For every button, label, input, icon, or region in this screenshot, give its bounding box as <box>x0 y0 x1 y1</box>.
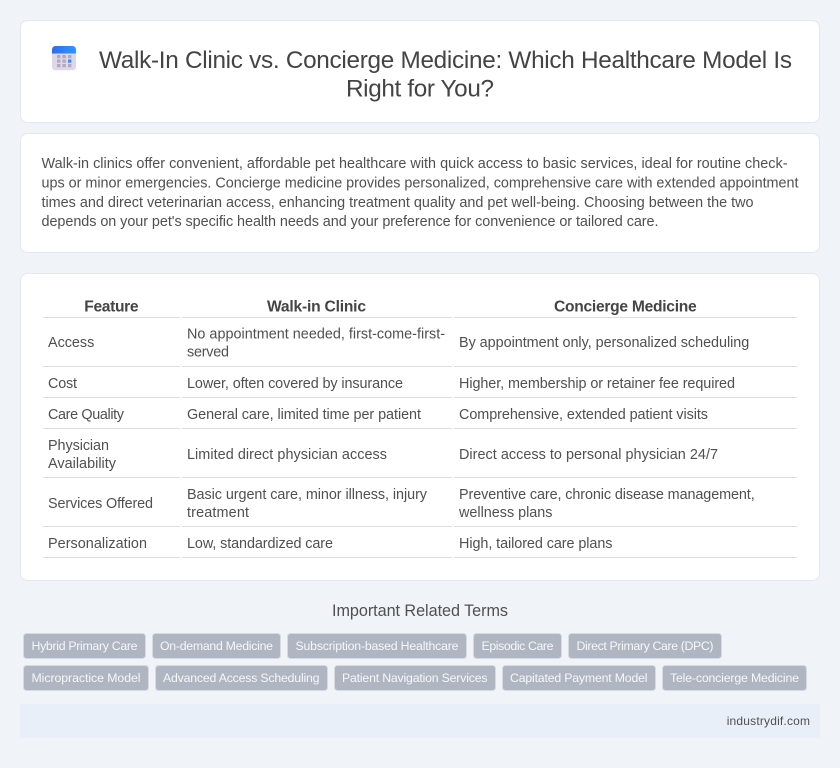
text block: summary paragraph: depends on your pet's specific health needs and your preference for convenience or tailored care. <box>42 214 658 230</box>
tag: subscription-based healthcare: Subscription-based Healthcare <box>296 639 459 653</box>
table row: access: No appointment needed, first-come-first- <box>187 327 445 343</box>
table row: care quality: General care, limited time per patient <box>187 407 421 423</box>
text block: summary paragraph: times and direct veterinarian access, enhancing treatment quality and pet well-being. Choosing between the two <box>42 195 754 211</box>
tag: micropractice model: Micropractice Model <box>32 671 140 685</box>
table row: personalization <box>48 536 612 552</box>
title <box>99 47 792 102</box>
table header: Feature <box>84 298 139 316</box>
table row: services offered: treatment <box>187 505 249 521</box>
title: Walk-In Clinic vs. Concierge Medicine: Which Healthcare Model Is <box>99 47 792 74</box>
icon: calendar <box>52 46 76 70</box>
tag: on-demand medicine: On-demand Medicine <box>160 639 273 653</box>
tag: episodic care <box>474 634 562 658</box>
tag: patient navigation services <box>334 666 496 690</box>
tag: hybrid primary care: Hybrid Primary Care <box>32 639 138 653</box>
text block: summary paragraph: ups or minor emergencies. Concierge medicine provides personalized, comprehensive care with extended appointment <box>42 176 798 192</box>
table row: physician availability: Availability <box>48 456 117 472</box>
tags: related terms <box>24 634 806 690</box>
table row: services offered: wellness plans <box>458 505 552 521</box>
heading: important related terms: Important Related Terms <box>332 602 508 620</box>
table row: cost <box>48 376 735 392</box>
panel: summary <box>20 134 820 252</box>
table header <box>84 298 697 316</box>
footer <box>20 704 820 738</box>
tag: tele-concierge medicine: Tele-concierge Medicine <box>670 671 799 685</box>
panel: title header <box>20 20 820 122</box>
tag: episodic care: Episodic Care <box>482 639 554 653</box>
table row: care quality <box>48 407 708 423</box>
tag: direct primary care: Direct Primary Care (DPC) <box>576 639 714 653</box>
table row: services offered: Services Offered <box>48 496 153 512</box>
table row: care quality: Comprehensive, extended patient visits <box>459 407 708 423</box>
tag: patient navigation services: Patient Navigation Services <box>342 671 488 685</box>
table row: care quality: Care Quality <box>48 407 125 423</box>
table header: Walk-in Clinic <box>267 298 366 316</box>
table row: physician availability <box>48 438 718 472</box>
tag: capitated payment model: Capitated Payment Model <box>510 671 648 685</box>
table row: cost: Higher, membership or retainer fee required <box>459 376 735 392</box>
table row: access <box>48 327 749 361</box>
tag: capitated payment model <box>502 666 656 690</box>
table row: personalization: High, tailored care plans <box>459 536 612 552</box>
table row: access: Access <box>48 335 94 351</box>
title: Right for You? <box>346 76 494 102</box>
tag: subscription-based healthcare <box>288 634 466 658</box>
table row: cost: Cost <box>48 376 77 392</box>
tag: on-demand medicine <box>152 634 280 658</box>
text block: summary paragraph: Walk-in clinics offer convenient, affordable pet healthcare with quick access to basic services, ideal for routine check- <box>42 156 788 172</box>
table row: physician availability: Direct access to personal physician 24/7 <box>459 447 718 463</box>
panel: comparison table <box>20 274 820 580</box>
table row: personalization: Personalization <box>48 536 147 552</box>
tag: advanced access scheduling: Advanced Access Scheduling <box>163 671 320 685</box>
text block: summary paragraph <box>42 156 798 230</box>
table row: physician availability: Physician <box>48 438 109 454</box>
table row: cost: Lower, often covered by insurance <box>187 376 403 392</box>
tag: hybrid primary care <box>24 634 146 658</box>
table row: access: served <box>187 345 229 361</box>
footer: industrydif.com <box>727 714 810 728</box>
tag: micropractice model <box>24 666 148 690</box>
table row: personalization: Low, standardized care <box>187 536 333 552</box>
tag: tele-concierge medicine <box>662 666 806 690</box>
table header: Concierge Medicine <box>554 298 697 316</box>
table row: access: By appointment only, personalized scheduling <box>459 335 749 351</box>
table row: services offered: Preventive care, chronic disease management, <box>459 487 755 503</box>
tag: direct primary care <box>568 634 722 658</box>
tag: advanced access scheduling <box>156 666 328 690</box>
table row: services offered: Basic urgent care, minor illness, injury <box>187 487 428 503</box>
table row: physician availability: Limited direct physician access <box>187 447 387 463</box>
table row: services offered <box>48 487 755 521</box>
